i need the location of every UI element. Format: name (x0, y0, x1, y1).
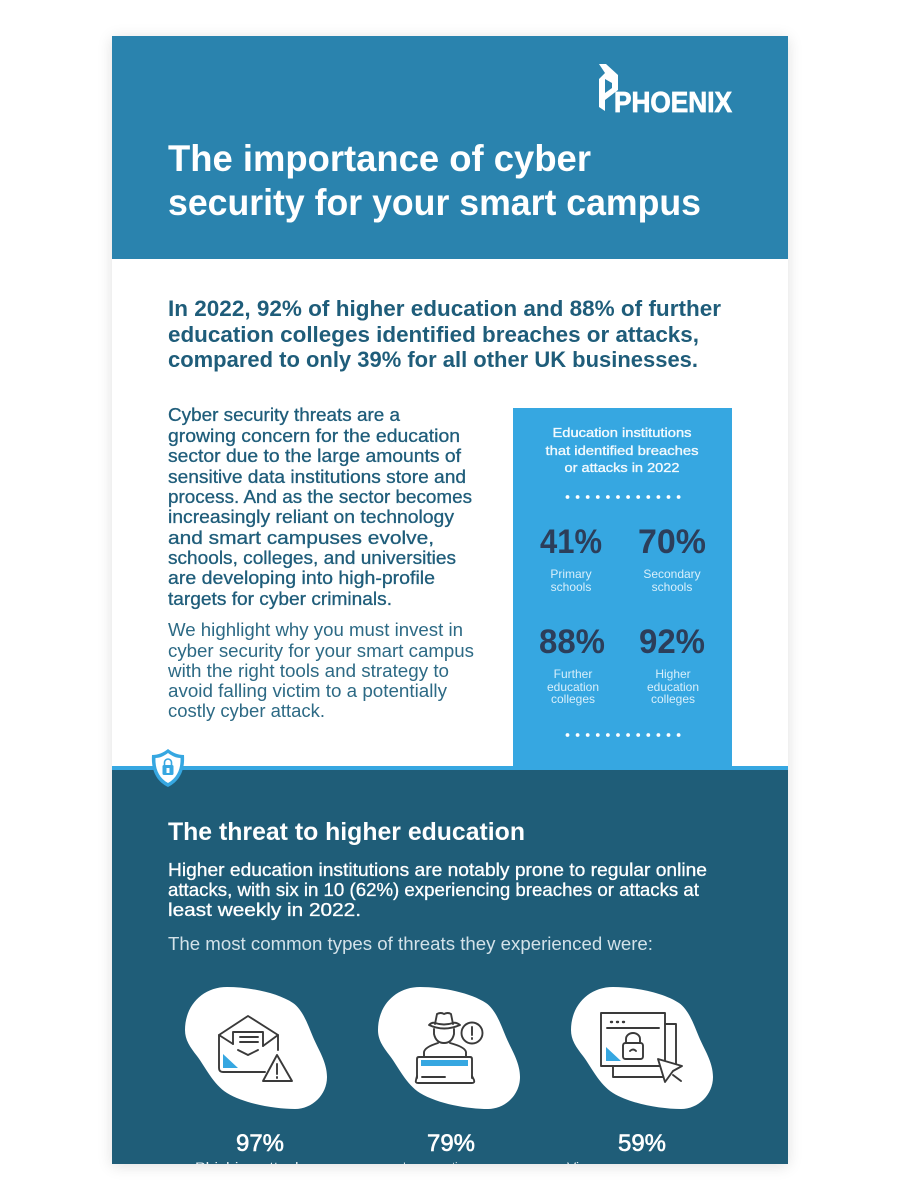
dotted divider bottom (566, 733, 680, 737)
text block: invest paragraph: We highlight why you must invest in (168, 620, 463, 640)
panel: header (112, 36, 788, 259)
panel: the threat to higher education (112, 749, 788, 1175)
text block: threats paragraph: sensitive data institutions store and (168, 467, 466, 487)
stat: further education colleges 88%: education (547, 680, 599, 694)
stat: higher education colleges 92%: education (647, 680, 699, 694)
stat: primary schools 41% (540, 523, 602, 594)
text block: threats paragraph: and smart campuses evolve, (168, 528, 434, 548)
title: The importance of cyber (168, 138, 591, 179)
text block: threats paragraph: sector due to the large amounts of (168, 446, 462, 466)
stat: further education colleges 88% (539, 623, 605, 706)
panel heading (546, 425, 699, 475)
icon: browser with padlock and cursor (601, 1013, 682, 1082)
icon: shield with padlock (152, 749, 184, 787)
text block: weekly attacks: attacks, with six in 10 (62%) experiencing breaches or attacks at (168, 880, 699, 900)
stat: higher education colleges 92% (639, 623, 705, 706)
panel heading: that identified breaches (546, 443, 699, 458)
text block: threats paragraph: schools, colleges, and universities (168, 548, 456, 568)
stat: further education colleges 88%: Further (554, 667, 592, 681)
threat: phishing (185, 987, 327, 1175)
intro headline: In 2022, 92% of higher education and 88% of further (168, 296, 721, 321)
stat: 97%: 97% (236, 1130, 284, 1157)
intro headline: compared to only 39% for all other UK businesses. (168, 347, 698, 372)
text: common threats intro: The most common types of threats they experienced were: (168, 934, 653, 954)
logo: Phoenix (599, 64, 733, 119)
section heading: The threat to higher education (168, 818, 525, 846)
text block: invest paragraph (167, 620, 474, 721)
text block: threats paragraph: targets for cyber criminals. (168, 589, 392, 609)
label: phishing attacks: Phishing attacks (195, 1159, 311, 1175)
title (168, 138, 701, 223)
panel heading: or attacks in 2022 (564, 460, 680, 475)
text block: invest paragraph: cyber security for your smart campus (168, 641, 474, 661)
logo: Phoenix: PHOENIX (614, 87, 733, 119)
label: viruses: Viruses (567, 1159, 613, 1175)
title: security for your smart campus (168, 182, 701, 223)
text block: threats paragraph: increasingly reliant on technology (168, 507, 454, 527)
text block: threats paragraph: growing concern for the education (168, 426, 460, 446)
stat: 79%: 79% (427, 1130, 475, 1157)
text block: weekly attacks: least weekly in 2022. (168, 900, 361, 920)
stat: secondary schools 70% (638, 523, 706, 594)
text block: invest paragraph: costly cyber attack. (168, 701, 325, 721)
stat: primary schools 41%: Primary (550, 567, 592, 581)
stat: further education colleges 88%: colleges (551, 692, 595, 706)
text block: threats paragraph (168, 405, 472, 609)
stat: secondary schools 70%: Secondary (643, 567, 701, 581)
dotted divider top (566, 495, 680, 499)
stat: higher education colleges 92%: 92% (639, 623, 705, 661)
text block: invest paragraph: with the right tools and strategy to (167, 661, 449, 681)
icon: envelope with warning (219, 1016, 292, 1081)
stat: secondary schools 70%: 70% (638, 523, 706, 561)
stat: primary schools 41%: schools (551, 580, 591, 594)
text block: threats paragraph: process. And as the sector becomes (168, 487, 472, 507)
threat: impersonation (378, 987, 520, 1175)
panel: education institutions statistics (513, 408, 732, 766)
text block: threats paragraph: Cyber security threats are a (168, 405, 401, 425)
panel heading: Education institutions (552, 425, 692, 440)
label: impersonation: Impersonation (403, 1159, 469, 1175)
intro headline: education colleges identified breaches or attacks, (168, 322, 699, 347)
text block: invest paragraph: avoid falling victim to a potentially (168, 681, 447, 701)
text block: weekly attacks (168, 860, 707, 920)
intro headline (168, 296, 721, 372)
stat: higher education colleges 92%: Higher (655, 667, 691, 681)
stat: 59%: 59% (618, 1130, 666, 1157)
stat: further education colleges 88%: 88% (539, 623, 605, 661)
text block: weekly attacks: Higher education institutions are notably prone to regular online (168, 860, 707, 880)
threat: viruses (567, 987, 713, 1175)
text block: threats paragraph: are developing into high-profile (168, 568, 435, 588)
stat: primary schools 41%: 41% (540, 523, 602, 561)
stat: secondary schools 70%: schools (652, 580, 692, 594)
stat: higher education colleges 92%: colleges (651, 692, 695, 706)
icon: hacker at laptop (416, 1013, 482, 1083)
